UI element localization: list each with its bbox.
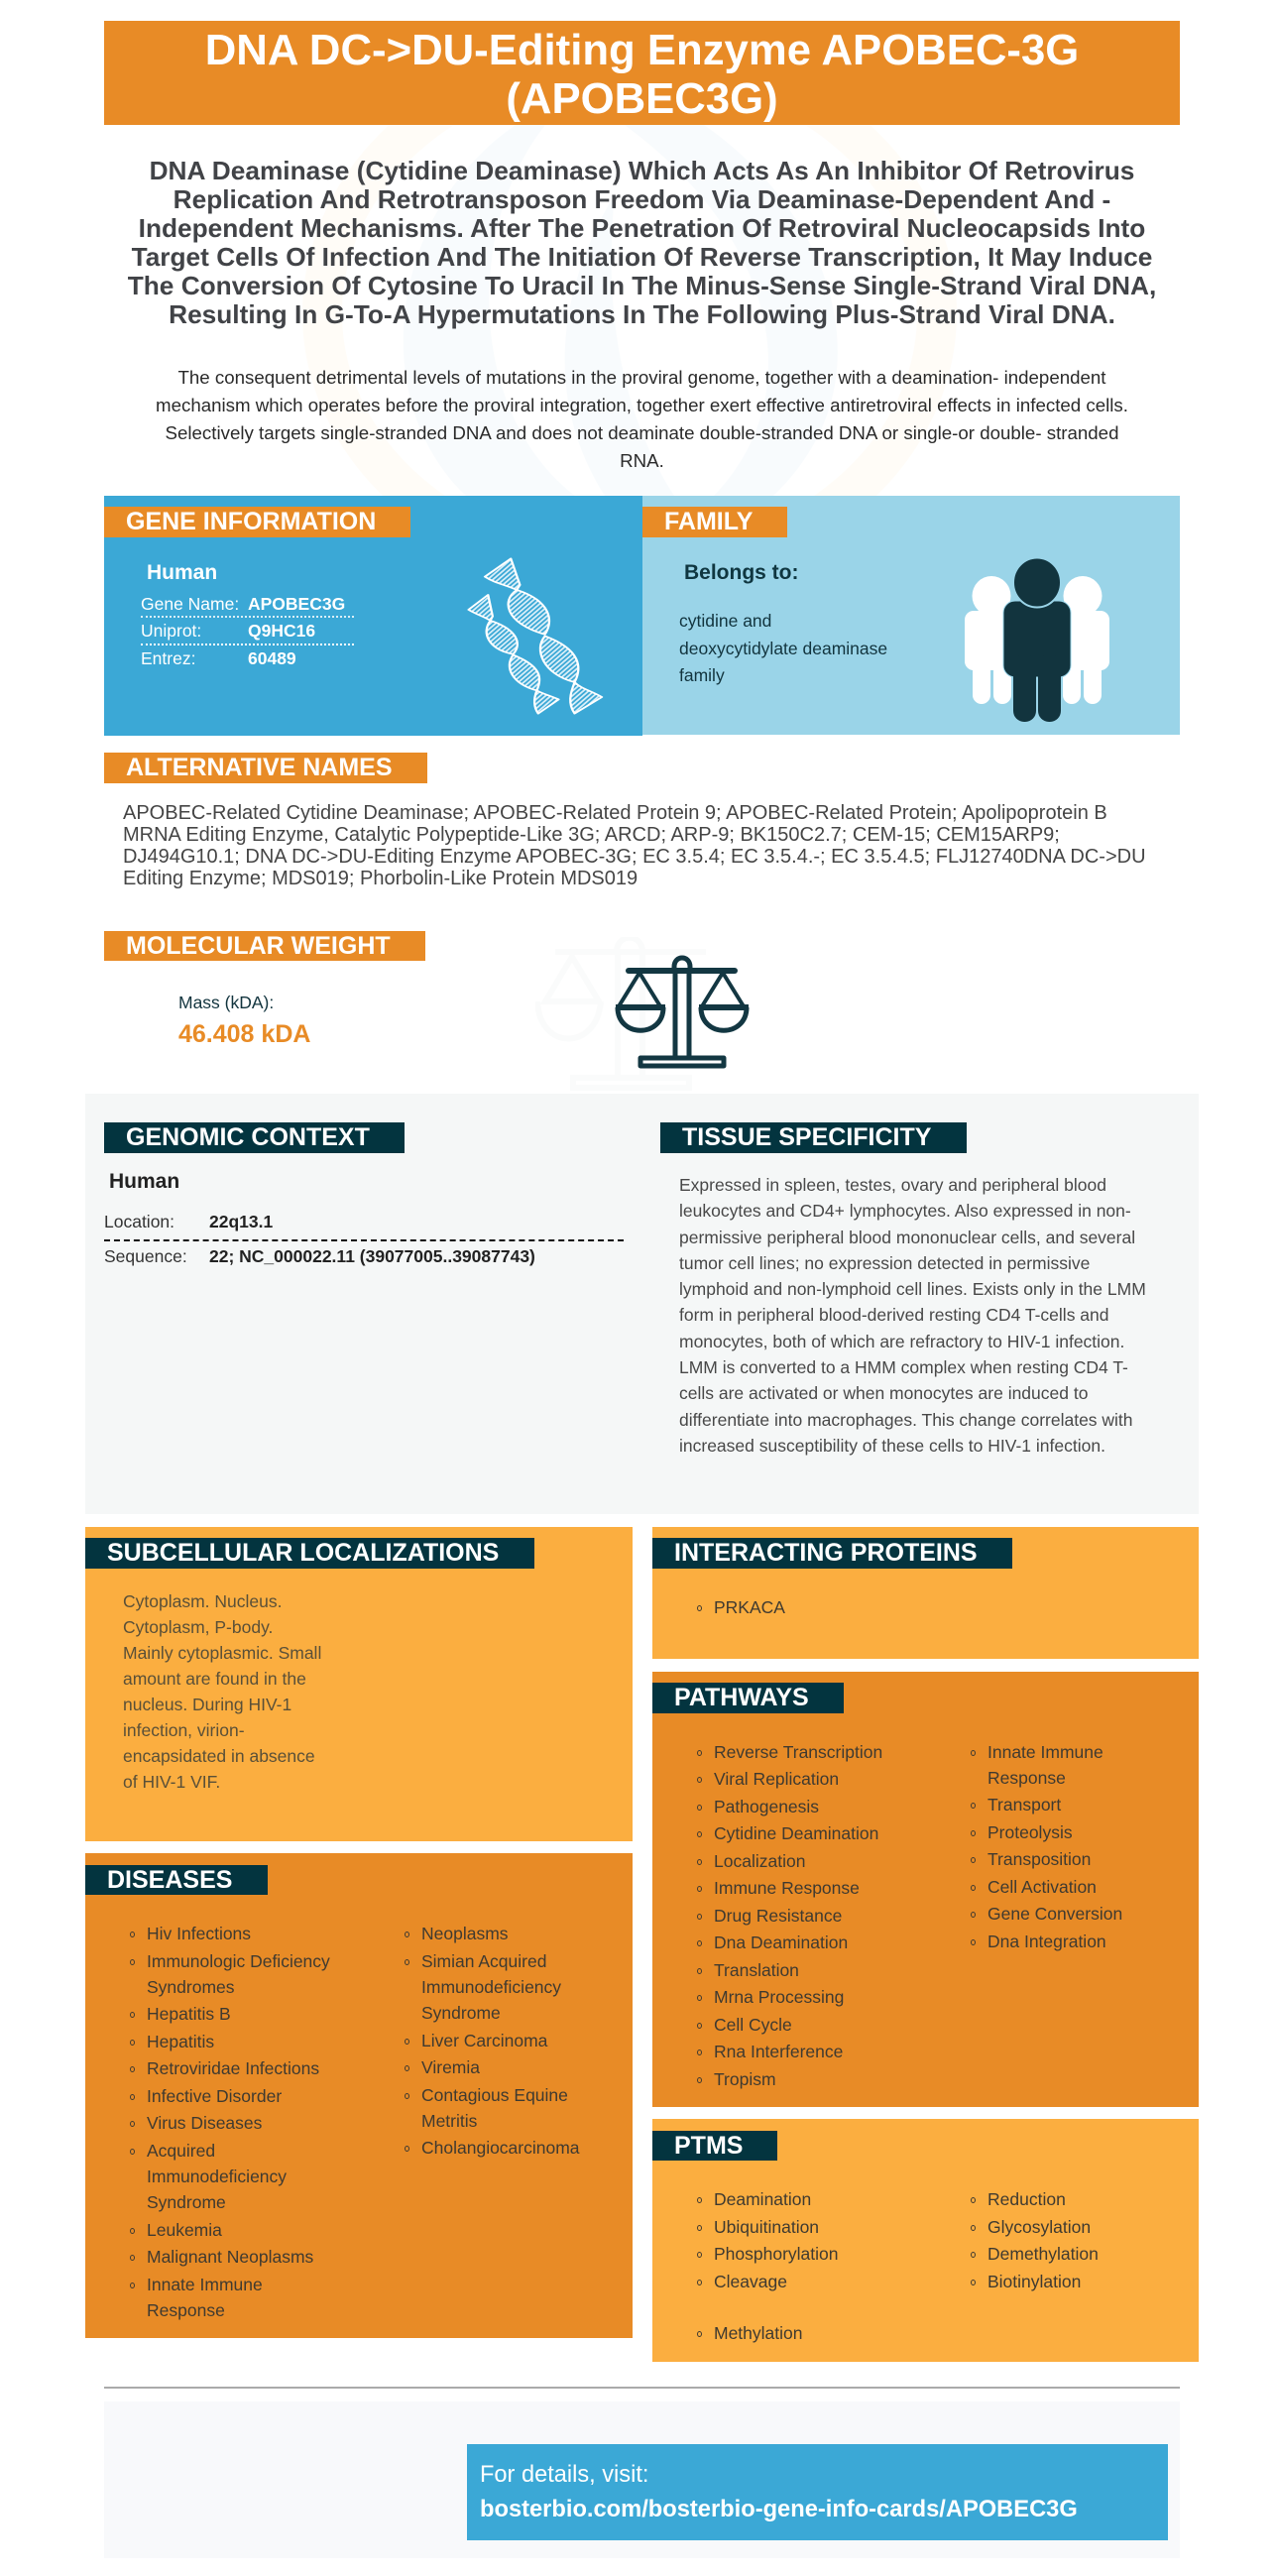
title banner [104, 21, 1180, 125]
list: ptms column 2: Biotinylation [987, 2272, 1081, 2291]
list: pathways column 1: Immune Response [714, 1878, 860, 1898]
panel: genomic context and tissue specificity [85, 1094, 1199, 1514]
heading: diseases [85, 1865, 268, 1895]
list: diseases column 2: Liver Carcinoma [421, 2031, 547, 2050]
list: pathways column 1: Translation [714, 1960, 799, 1980]
list: ptms column 1: Ubiquitination [714, 2217, 819, 2237]
list: pathways column 1: Viral Replication [714, 1769, 839, 1789]
subcellular text: of HIV-1 VIF. [123, 1772, 220, 1792]
uniprot row: Q9HC16 [248, 621, 315, 641]
sequence row: 22; NC_000022.11 (39077005..39087743) [209, 1246, 535, 1266]
tissue specificity text: form in peripheral blood-derived resting CD4 T-cells and [679, 1305, 1109, 1325]
callout text: url: bosterbio.com/bosterbio-gene-info-cards/APOBEC3G [480, 2497, 1078, 2522]
gene name row [141, 592, 354, 618]
description paragraph: The consequent detrimental levels of mutations in the proviral genome, together with a deamination- independent [178, 367, 1105, 388]
entrez row: Entrez: [141, 648, 195, 668]
family description [679, 611, 887, 685]
panel: pathways [652, 1672, 1199, 2107]
list: ptms column 1: Phosphorylation [714, 2244, 839, 2264]
tissue specificity text: leukocytes and CD4+ lymphocytes. Also expressed in non- [679, 1201, 1131, 1221]
heading: pathways [652, 1683, 844, 1713]
summary heading: Replication And Retrotransposon Freedom Via Deaminase-Dependent And - [174, 184, 1110, 214]
location row: Location: [104, 1212, 174, 1231]
alternative names text: APOBEC-Related Cytidine Deaminase; APOBEC-Related Protein 9; APOBEC-Related Protein; Apolipoprotein B [123, 802, 1107, 824]
list: diseases column 1: Syndrome [147, 2192, 226, 2212]
alternative names text: MRNA Editing Enzyme, Catalytic Polypeptide-Like 3G; ARCD; ARP-9; BK150C2.7; CEM-15; CEM15ARP9; [123, 824, 1060, 846]
heading: pathways: PATHWAYS [674, 1684, 809, 1711]
list: ptms column 2 [971, 2189, 1099, 2291]
panel: interacting proteins [652, 1527, 1199, 1659]
summary heading: The Conversion Of Cytosine To Uracil In The Minus-Sense Single-Strand Viral DNA, [128, 271, 1156, 300]
list: pathways column 1: Dna Deamination [714, 1932, 848, 1952]
callout text: intro: For details, visit: [480, 2462, 648, 2488]
list: ptms column 1: Methylation [714, 2323, 803, 2343]
list: diseases column 1: Infective Disorder [147, 2086, 282, 2106]
description paragraph: RNA. [620, 450, 664, 471]
sequence row: Sequence: [104, 1246, 187, 1266]
tissue specificity text: lymphoid and non-lymphoid cell lines. Exists only in the LMM [679, 1279, 1146, 1299]
list: diseases column 2: Syndrome [421, 2003, 501, 2023]
family description: deoxycytidylate deaminase [679, 639, 887, 658]
list: ptms column 2: Reduction [987, 2189, 1066, 2209]
callout: details link [467, 2444, 1168, 2540]
subcellular text: Cytoplasm. Nucleus. [123, 1591, 282, 1611]
description paragraph: mechanism which operates before the proviral integration, together exert effective antiretroviral effects in infected cells. [156, 395, 1128, 415]
list: diseases column 2: Simian Acquired [421, 1951, 546, 1971]
subcellular text: Cytoplasm, P-body. [123, 1617, 273, 1637]
list: diseases column 1: Hiv Infections [147, 1924, 251, 1943]
panel: family [642, 496, 1180, 735]
list: diseases column 2 [405, 1924, 580, 2158]
entrez row: 60489 [248, 648, 296, 668]
list: pathways column 1: Drug Resistance [714, 1906, 842, 1926]
list: ptms column 1 [697, 2189, 839, 2343]
heading: alternative names: ALTERNATIVE NAMES [126, 754, 393, 781]
list: pathways column 2: Dna Integration [987, 1932, 1106, 1951]
heading: gene information: GENE INFORMATION [126, 508, 376, 535]
list: diseases column 1 [130, 1924, 330, 2320]
sequence row [104, 1239, 624, 1268]
list: diseases column 2: Cholangiocarcinoma [421, 2138, 580, 2158]
title banner: (APOBEC3G) [506, 74, 778, 123]
list: pathways column 1: Mrna Processing [714, 1987, 844, 2007]
list: diseases column 1: Retroviridae Infections [147, 2058, 319, 2078]
panel: subcellular localizations [85, 1527, 633, 1841]
icon: dna helix [467, 557, 603, 714]
species label: Human [109, 1170, 179, 1193]
mass value: 46.408 kDA [178, 1020, 310, 1048]
list: ptms column 1: Deamination [714, 2189, 811, 2209]
icon: balance scale [615, 956, 750, 1069]
list: pathways column 1: Tropism [714, 2069, 776, 2089]
list: pathways column 2 [971, 1742, 1122, 1951]
list: pathways column 2: Innate Immune [987, 1742, 1103, 1762]
uniprot row: Uniprot: [141, 621, 201, 641]
tissue specificity text: differentiate into macrophages. This change correlates with [679, 1410, 1133, 1430]
list: diseases column 2: Neoplasms [421, 1924, 509, 1943]
subcellular text: amount are found in the [123, 1669, 306, 1689]
summary heading: DNA Deaminase (Cytidine Deaminase) Which Acts As An Inhibitor Of Retrovirus [150, 156, 1134, 185]
tissue specificity text: monocytes, both of which are refractory to HIV-1 infection. [679, 1332, 1124, 1351]
belongs to label: Belongs to: [684, 561, 799, 584]
list: diseases column 2: Contagious Equine [421, 2085, 568, 2105]
list: proteins: PRKACA [714, 1597, 785, 1617]
description paragraph: Selectively targets single-stranded DNA and does not deaminate double-stranded DNA or single-or double- stranded [166, 422, 1118, 443]
list: diseases column 1: Malignant Neoplasms [147, 2247, 313, 2267]
list: pathways column 2: Transposition [987, 1849, 1091, 1869]
list: pathways column 1: Rna Interference [714, 2042, 843, 2061]
subcellular text: nucleus. During HIV-1 [123, 1695, 291, 1714]
tissue specificity text: LMM is converted to a HMM complex when resting CD4 T- [679, 1357, 1128, 1377]
title banner: DNA DC->DU-Editing Enzyme APOBEC-3G [205, 26, 1079, 74]
list: pathways column 1 [697, 1742, 882, 2089]
mass label: Mass (kDA): [178, 993, 274, 1012]
list: diseases column 1: Leukemia [147, 2220, 222, 2240]
list: ptms column 2: Glycosylation [987, 2217, 1091, 2237]
panel: gene information [104, 496, 642, 736]
heading: genomic context: GENOMIC CONTEXT [126, 1123, 370, 1151]
gene name row: Gene Name: [141, 594, 239, 614]
family description: family [679, 665, 725, 685]
heading: family: FAMILY [664, 508, 753, 535]
tissue specificity text [679, 1175, 1146, 1456]
list: pathways column 1: Pathogenesis [714, 1797, 819, 1816]
list: diseases column 2: Metritis [421, 2111, 477, 2131]
subcellular text: Mainly cytoplasmic. Small [123, 1643, 321, 1663]
panel: ptms [652, 2119, 1199, 2362]
list: pathways column 2: Gene Conversion [987, 1904, 1122, 1924]
summary heading: Target Cells Of Infection And The Initiation Of Reverse Transcription, It May Induce [132, 242, 1152, 272]
summary heading: Independent Mechanisms. After The Penetration Of Retroviral Nucleocapsids Into [139, 213, 1145, 243]
list: diseases column 1: Immunodeficiency [147, 2166, 287, 2186]
tissue specificity text: permissive peripheral blood mononuclear cells, and several [679, 1228, 1135, 1247]
heading: ptms [652, 2131, 777, 2161]
background watermark logo [278, 125, 1011, 496]
list: pathways column 1: Cytidine Deamination [714, 1823, 878, 1843]
icon: people [965, 559, 1109, 722]
heading: diseases: DISEASES [107, 1866, 232, 1894]
list: diseases column 1: Acquired [147, 2141, 215, 2161]
alternative names text: Editing Enzyme; MDS019; Phorbolin-Like Protein MDS019 [123, 868, 638, 889]
heading: molecular weight: MOLECULAR WEIGHT [126, 932, 391, 960]
list: diseases column 1: Innate Immune [147, 2275, 263, 2294]
location row [104, 1212, 273, 1231]
list: diseases column 1: Virus Diseases [147, 2113, 262, 2133]
panel: diseases [85, 1853, 633, 2338]
panel: genomic context and tissue specificity: 22q13.1 [209, 1212, 273, 1231]
list: pathways column 2: Response [987, 1768, 1066, 1788]
list: pathways column 1: Localization [714, 1851, 805, 1871]
species label: Human [147, 561, 217, 584]
entrez row [141, 648, 296, 668]
uniprot row [141, 619, 354, 645]
gene name row: APOBEC3G [248, 594, 345, 614]
heading: ptms: PTMS [674, 2132, 743, 2160]
list: pathways column 2: Transport [987, 1795, 1061, 1815]
tissue specificity text: cells are activated or when monocytes are induced to [679, 1383, 1088, 1403]
description paragraph [156, 367, 1128, 471]
subcellular text: encapsidated in absence [123, 1746, 315, 1766]
list: pathways column 1: Cell Cycle [714, 2015, 792, 2035]
list: pathways column 2: Cell Activation [987, 1877, 1097, 1897]
list: ptms column 1: Cleavage [714, 2272, 787, 2291]
summary heading: Resulting In G-To-A Hypermutations In The Following Plus-Strand Viral DNA. [169, 299, 1115, 329]
list: diseases column 2: Immunodeficiency [421, 1977, 561, 1997]
list: ptms column 2: Demethylation [987, 2244, 1099, 2264]
heading: tissue specificity: TISSUE SPECIFICITY [682, 1123, 931, 1151]
tissue specificity text: increased susceptibility of these cells to HIV-1 infection. [679, 1436, 1105, 1456]
tissue specificity text: Expressed in spleen, testes, ovary and peripheral blood [679, 1175, 1106, 1195]
list: diseases column 1: Response [147, 2300, 225, 2320]
alternative names text [123, 802, 1146, 889]
family description: cytidine and [679, 611, 771, 631]
subcellular text: infection, virion- [123, 1720, 245, 1740]
summary heading [128, 156, 1156, 329]
list: pathways column 1: Reverse Transcription [714, 1742, 882, 1762]
panel: footer [104, 2401, 1180, 2558]
heading: subcellular localizations: SUBCELLULAR LOCALIZATIONS [107, 1539, 499, 1567]
list: diseases column 1: Syndromes [147, 1977, 235, 1997]
subcellular text [123, 1591, 321, 1792]
tissue specificity text: tumor cell lines; no expression detected in permissive [679, 1253, 1090, 1273]
list: diseases column 2: Viremia [421, 2057, 480, 2077]
alternative names text: DJ494G10.1; DNA DC->DU-Editing Enzyme APOBEC-3G; EC 3.5.4; EC 3.5.4.-; EC 3.5.4.5; FLJ12740DNA DC->DU [123, 846, 1146, 868]
heading: interacting proteins: INTERACTING PROTEINS [674, 1539, 978, 1567]
list: diseases column 1: Immunologic Deficiency [147, 1951, 330, 1971]
list: pathways column 2: Proteolysis [987, 1822, 1073, 1842]
list: diseases column 1: Hepatitis [147, 2032, 214, 2051]
list: diseases column 1: Hepatitis B [147, 2004, 231, 2024]
heading: family [642, 507, 787, 537]
